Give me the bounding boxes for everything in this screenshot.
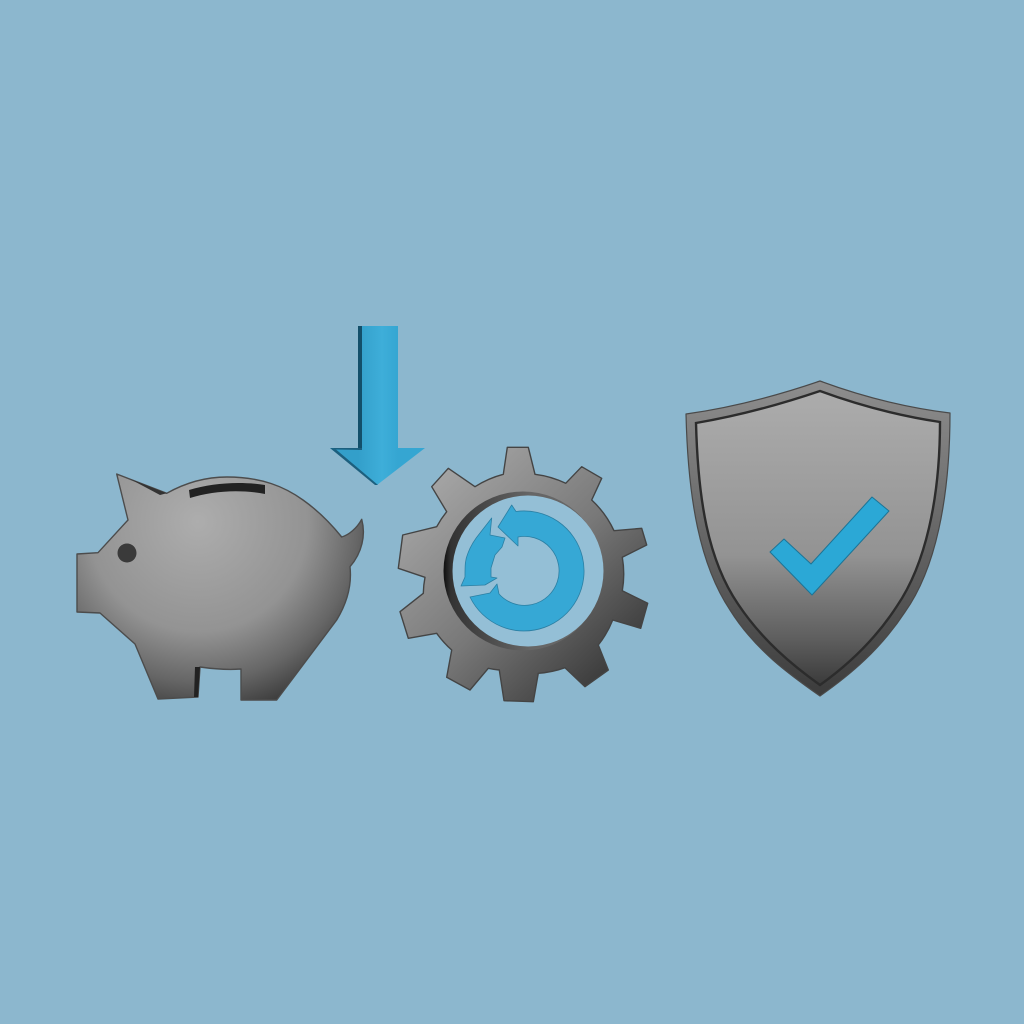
icon: piggy bank [77, 474, 363, 700]
shield rim [686, 381, 950, 696]
gear body [398, 447, 648, 702]
shield face [696, 391, 940, 685]
ear shadow [130, 479, 167, 495]
pig eye [118, 544, 136, 562]
gear hole [444, 492, 602, 650]
large cycle arrow [470, 505, 584, 631]
coin slot [189, 483, 265, 498]
gear hole light disc [452, 496, 604, 646]
icon: gear with cycle arrows [398, 447, 648, 702]
leg shadow [194, 667, 200, 697]
check mark [770, 497, 889, 595]
arrow: downward blue arrow [330, 326, 425, 485]
small cycle arrow [461, 518, 505, 586]
icon: shield with check mark [686, 381, 950, 696]
